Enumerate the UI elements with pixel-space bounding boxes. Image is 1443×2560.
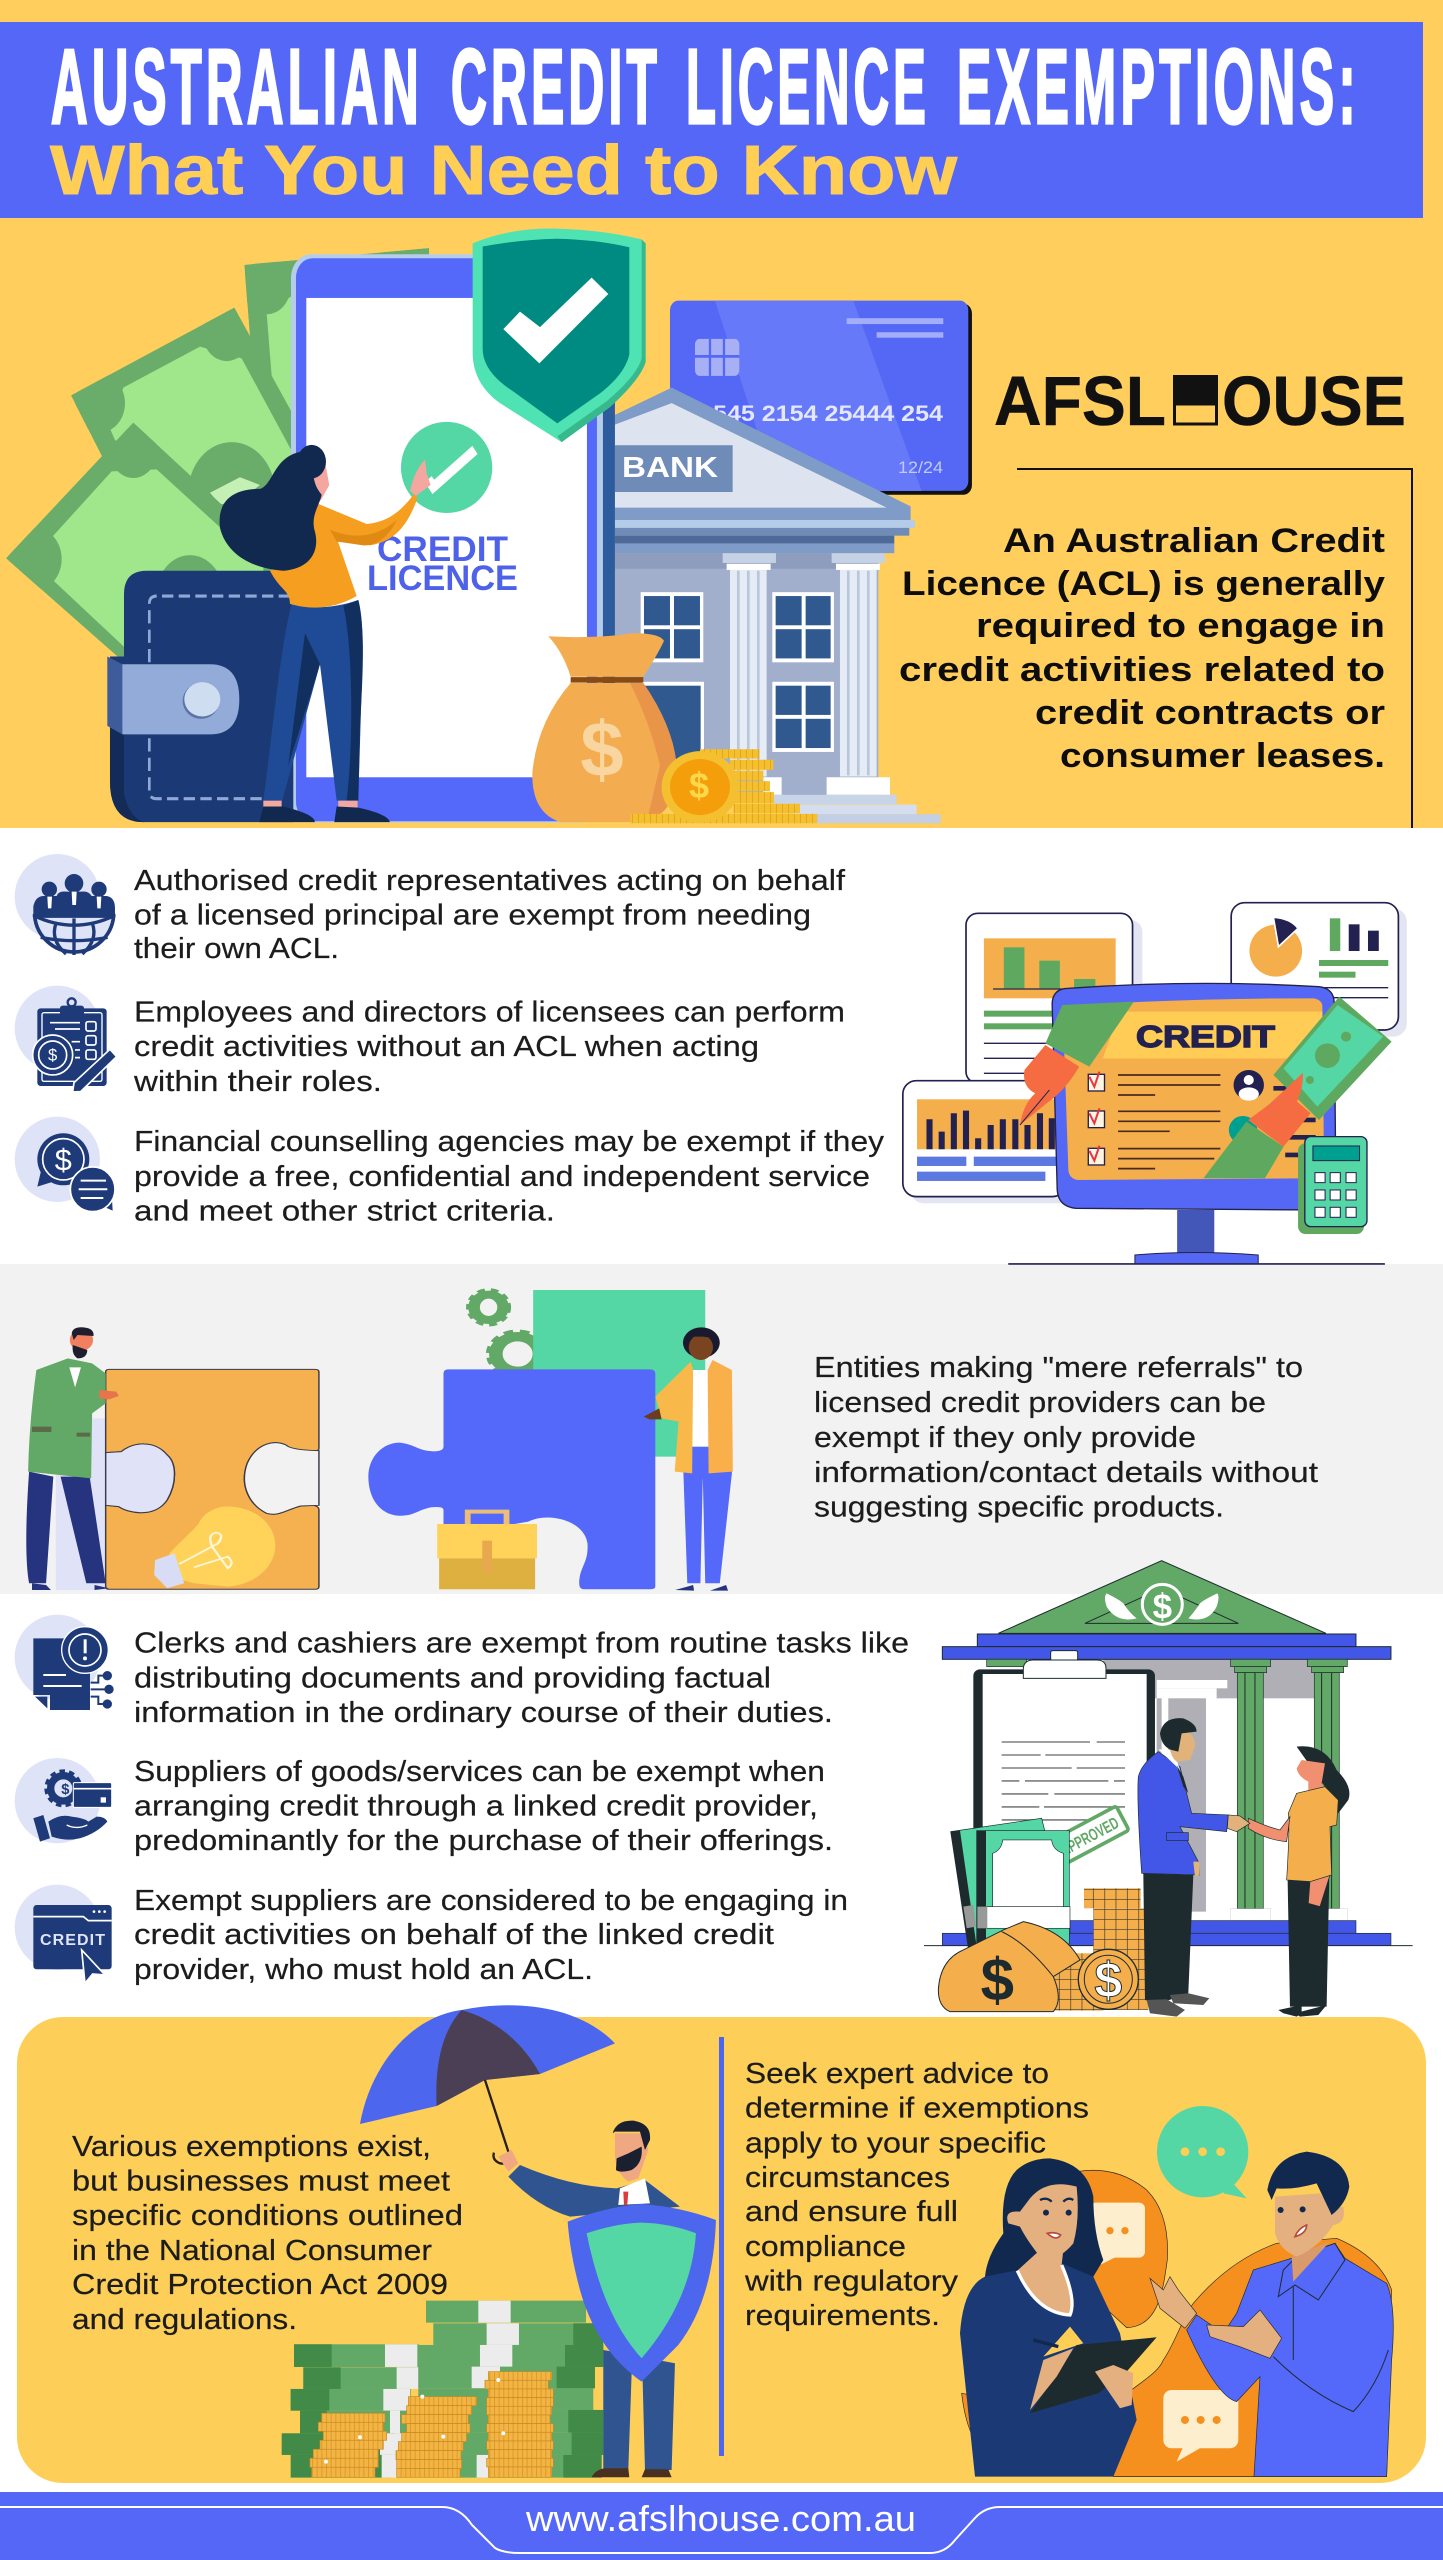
icon: smartphone [291, 254, 615, 822]
banknote stacks [282, 2301, 603, 2478]
woman with clipboard [960, 2158, 1157, 2477]
chart sheet: pie [1231, 903, 1407, 1037]
illustration: puzzle pieces and people [26, 1290, 733, 1591]
text: various exemptions: in the National Consumer [72, 2235, 433, 2267]
icon: banknotes [6, 248, 433, 688]
hero yellow background [0, 0, 1443, 828]
woman in yellow jacket [644, 1327, 733, 1591]
intro text block: credit activities related to [899, 651, 1385, 689]
text: clerks and cashiers: distributing documents and providing factual [134, 1662, 771, 1694]
text: financial counselling agencies: Financial counselling agencies may be exempt if they [134, 1126, 885, 1158]
text: seek expert advice [744, 2058, 1089, 2332]
approved stamp: APPROVED [1057, 1813, 1122, 1860]
icon: credit browser window [15, 1885, 112, 1983]
text: employees and directors: credit activities without an ACL when acting [134, 1031, 759, 1063]
text: seek expert advice: compliance [745, 2231, 906, 2263]
text: clerks and cashiers: Clerks and cashiers are exempt from routine tasks like [134, 1628, 909, 1660]
orange blobs [962, 2170, 1392, 2477]
divider between panel columns [719, 2037, 724, 2456]
figure: woman pointing at phone [220, 445, 431, 822]
text: clerks and cashiers: information in the ordinary course of their duties. [134, 1697, 833, 1729]
monitor [1008, 983, 1385, 1264]
text: authorised representatives: of a licensed principal are exempt from needing [134, 900, 811, 932]
intro text block: credit contracts or [1035, 694, 1385, 732]
text: financial counselling agencies: and meet other strict criteria. [134, 1196, 555, 1228]
icon: bank building [615, 388, 941, 823]
gold coin [1078, 1949, 1138, 2009]
text: exempt suppliers: credit activities on behalf of the linked credit [134, 1919, 774, 1951]
footer band [0, 2492, 1443, 2560]
green speech bubble [1157, 2106, 1248, 2198]
icon: bank building: BANK [622, 452, 718, 484]
text: seek expert advice: circumstances [745, 2162, 950, 2194]
man with shield [498, 2121, 716, 2477]
icon: gear card and hand [15, 1758, 112, 1843]
cream speech bubbles [1090, 2203, 1238, 2462]
illustration: man with umbrella, shield and money [282, 2005, 716, 2478]
gold coin stacks [310, 2372, 553, 2477]
text: exempt suppliers [134, 1885, 848, 1986]
icon: credit card [670, 301, 972, 495]
intro text block: required to engage in [976, 607, 1385, 645]
logo: AFSL House: OUSE [1222, 362, 1406, 440]
green backdrop [533, 1290, 705, 1457]
text: suppliers of goods: predominantly for the purchase of their offerings. [134, 1825, 833, 1857]
hand pointing right [1203, 1073, 1311, 1178]
intro text block: An Australian Credit [1003, 522, 1385, 560]
text: various exemptions: specific conditions outlined [72, 2200, 463, 2232]
text: mere referrals: suggesting specific products. [814, 1492, 1224, 1524]
icon: clipboard with coin and pencil [15, 986, 117, 1092]
phone label: LICENCE [367, 559, 518, 598]
icon: credit card: 12/24 [898, 458, 943, 477]
approved stamp [1050, 1806, 1129, 1865]
text: seek expert advice: and ensure full [745, 2196, 958, 2228]
hero illustration [6, 229, 972, 823]
main title: CREDIT [451, 28, 661, 146]
illustration: bank with handshake [924, 1561, 1413, 2017]
website address: www.afslhouse.com.au [525, 2498, 916, 2539]
main title [51, 28, 1360, 146]
icon: wallet [107, 571, 293, 822]
illustration: credit monitor with charts: CREDIT [1136, 1019, 1275, 1054]
icon: money bag: $ [580, 705, 624, 793]
text: seek expert advice: Seek expert advice to [745, 2058, 1049, 2090]
icon: document alert [15, 1615, 114, 1710]
money bag: $ [981, 1947, 1014, 2014]
text: mere referrals [814, 1352, 1318, 1524]
clipboard document [973, 1651, 1155, 1907]
hand pointing left [1020, 1002, 1134, 1125]
bank facade [924, 1561, 1413, 1946]
light bulb [154, 1507, 275, 1588]
text: financial counselling agencies [134, 1126, 885, 1228]
gears [469, 1290, 547, 1377]
bank facade: $ [1153, 1587, 1172, 1626]
icon: dollar speech bubbles [15, 1117, 115, 1212]
money bag [938, 1922, 1080, 2014]
text: exempt suppliers: Exempt suppliers are considered to be engaging in [134, 1885, 848, 1917]
umbrella [360, 2005, 615, 2164]
illustration: credit monitor with charts [903, 903, 1407, 1264]
phone label [367, 530, 518, 598]
illustration: two people talking [960, 2106, 1393, 2477]
main title: AUSTRALIAN [51, 28, 423, 146]
text: employees and directors: Employees and directors of licensees can perform [134, 996, 845, 1028]
main title: LICENCE [686, 28, 930, 146]
grey referral band [0, 1264, 1443, 1594]
text: seek expert advice: requirements. [745, 2300, 940, 2332]
icon: gold coins [631, 749, 817, 823]
man gesturing [1150, 2152, 1393, 2477]
banknote stack [951, 1818, 1070, 1948]
text: authorised representatives: Authorised credit representatives acting on behalf [134, 865, 845, 897]
icon: security shield [473, 229, 646, 442]
text: mere referrals: exempt if they only provide [814, 1422, 1196, 1454]
gold coin: $ [1094, 1952, 1122, 2008]
briefcase [437, 1512, 537, 1589]
text: exempt suppliers: provider, who must hold an ACL. [134, 1954, 593, 1986]
intro text block [899, 522, 1385, 775]
logo: AFSL House: AFSL [994, 362, 1166, 440]
text: employees and directors: within their roles. [133, 1066, 382, 1098]
blue puzzle piece [368, 1369, 655, 1589]
calculator [1298, 1137, 1367, 1234]
businessman [1138, 1718, 1228, 2017]
subtitle: What You Need to Know [50, 131, 958, 209]
text: financial counselling agencies: provide a free, confidential and independent service [134, 1161, 870, 1193]
icon: gear card and hand: $ [61, 1782, 69, 1798]
text: authorised representatives: their own ACL. [134, 933, 339, 965]
text: various exemptions: and regulations. [72, 2304, 297, 2336]
intro text block: Licence (ACL) is generally [902, 565, 1385, 603]
text: suppliers of goods: arranging credit through a linked credit provider, [134, 1791, 818, 1823]
lavender backdrop panel [56, 1418, 124, 1590]
text: seek expert advice: determine if exemptions [745, 2092, 1089, 2124]
bottom yellow panel [17, 2017, 1426, 2483]
icon: clipboard with coin and pencil: $ [48, 1046, 57, 1065]
text: suppliers of goods: Suppliers of goods/services can be exempt when [134, 1756, 825, 1788]
text: various exemptions: Credit Protection Act 2009 [72, 2269, 448, 2301]
text: mere referrals: licensed credit providers can be [814, 1387, 1266, 1419]
coin stack [1053, 1888, 1148, 2011]
text: employees and directors [133, 996, 845, 1098]
icon: credit card: 545 2154 25444 254 [713, 401, 944, 426]
chart sheet: columns [903, 1081, 1072, 1203]
man in green coat [26, 1327, 119, 1590]
text: clerks and cashiers [134, 1628, 909, 1729]
text: seek expert advice: with regulatory [744, 2266, 959, 2298]
text: mere referrals: Entities making "mere referrals" to [814, 1352, 1303, 1384]
icon: people and globe [15, 854, 115, 955]
text: suppliers of goods [134, 1756, 833, 1857]
coin sparkles [324, 2378, 505, 2464]
businesswoman [1227, 1746, 1349, 2017]
icon: dollar speech bubbles: $ [55, 1143, 72, 1177]
icon: gold coins: $ [689, 765, 709, 806]
icon: money bag [532, 633, 677, 822]
intro text block: consumer leases. [1060, 737, 1385, 775]
icon: credit browser window: CREDIT [40, 1932, 105, 1949]
bracket line around intro text [1017, 469, 1412, 828]
text: seek expert advice: apply to your specific [745, 2128, 1046, 2160]
text: authorised representatives [134, 865, 845, 965]
text: various exemptions: Various exemptions exist, [72, 2131, 431, 2163]
phone label: CREDIT [377, 530, 508, 569]
cash stack [1273, 997, 1392, 1120]
text: mere referrals: information/contact details without [814, 1457, 1318, 1489]
title banner [0, 22, 1423, 218]
chart sheet: bars [966, 913, 1142, 1083]
logo: AFSL House [994, 362, 1406, 440]
text: various exemptions [72, 2131, 463, 2336]
text: various exemptions: but businesses must meet [72, 2166, 450, 2198]
orange puzzle piece [106, 1369, 319, 1589]
